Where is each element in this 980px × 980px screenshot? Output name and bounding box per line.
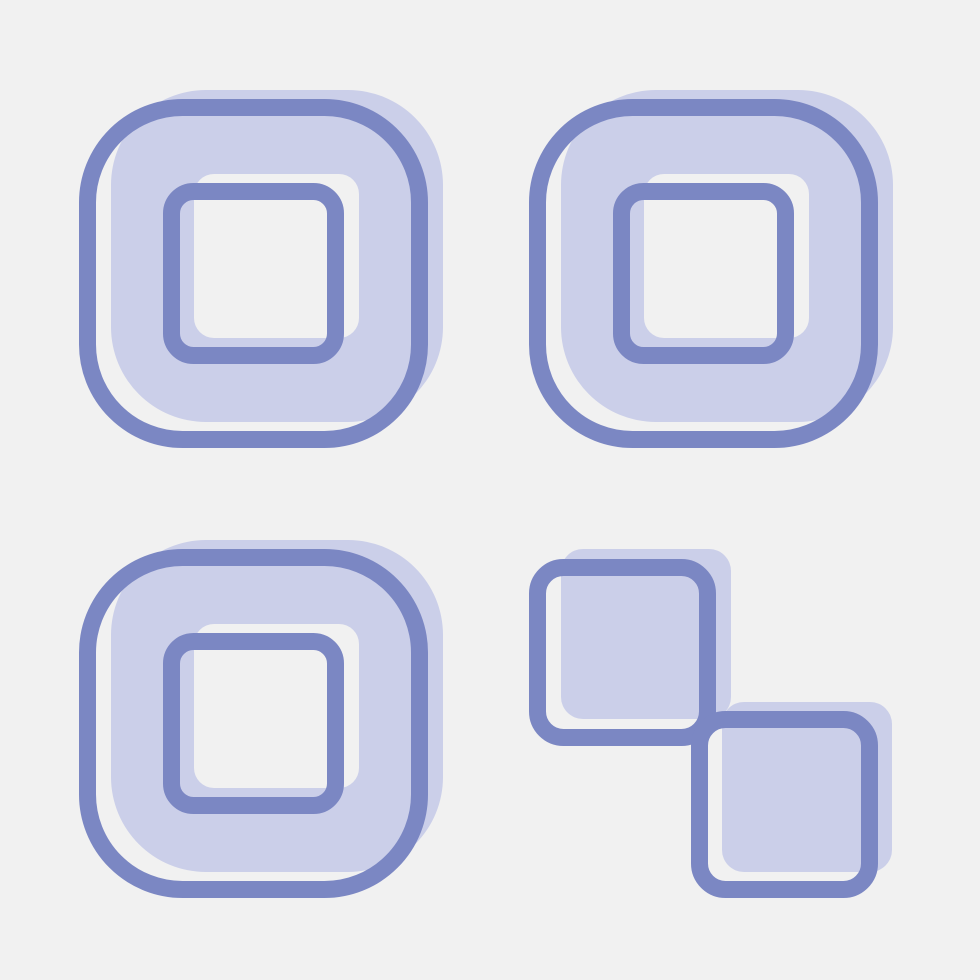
finder: bottom-left: [88, 540, 443, 890]
small squares: bottom-right: [538, 549, 892, 890]
finder: top-left: [88, 90, 443, 440]
finder: top-right: [538, 90, 893, 440]
